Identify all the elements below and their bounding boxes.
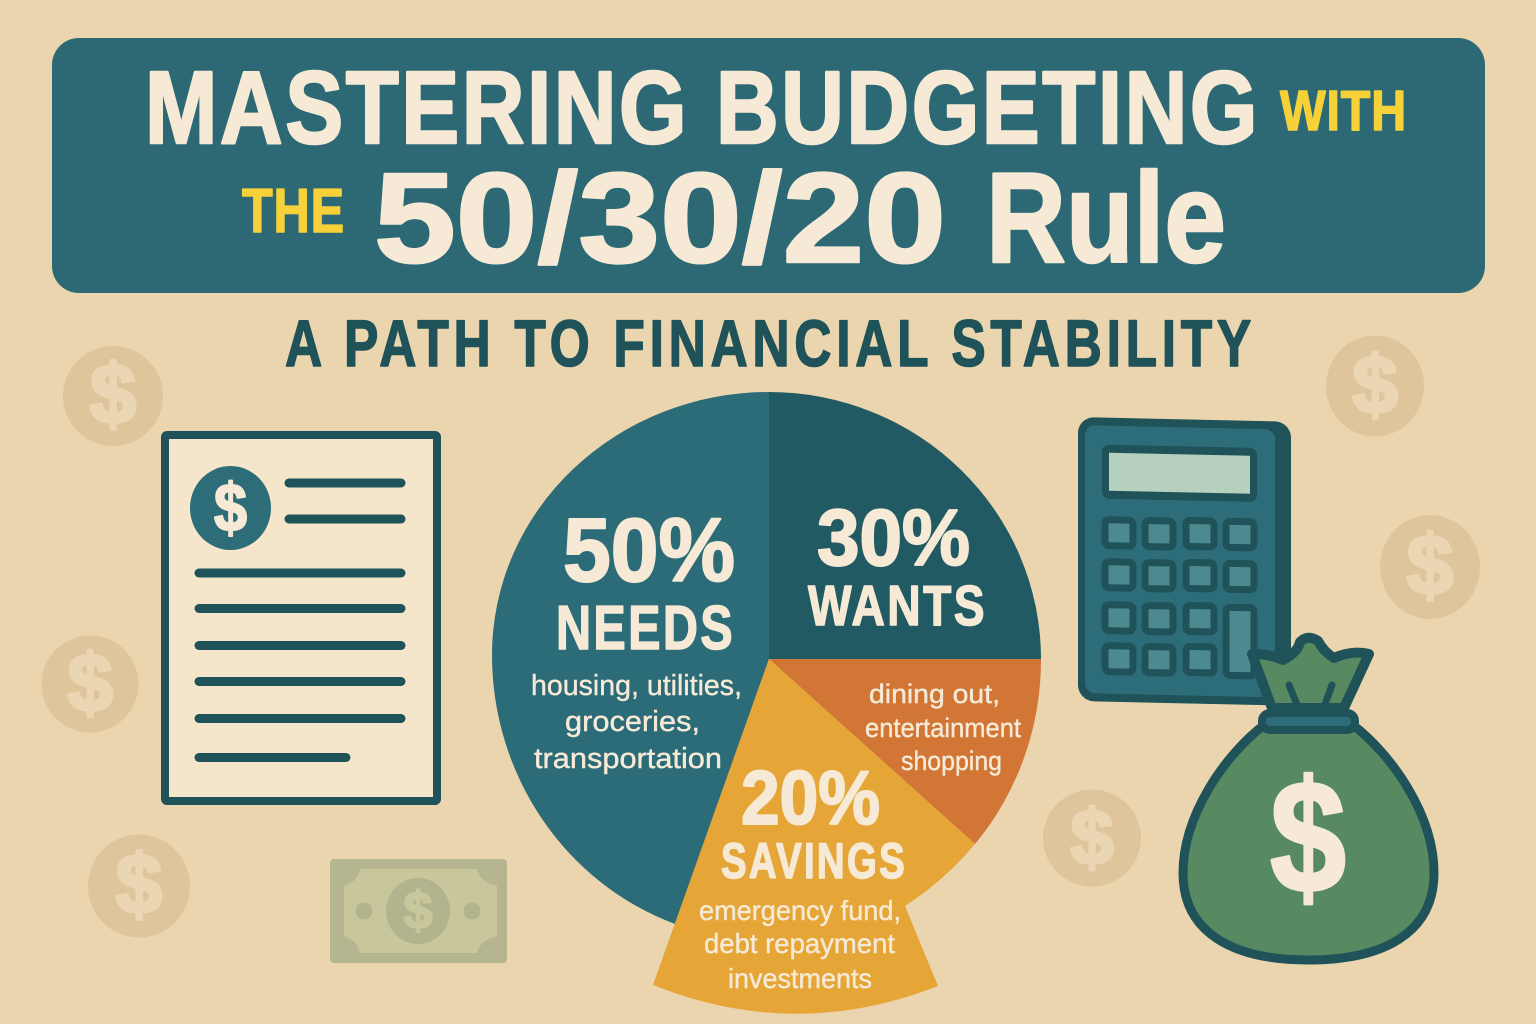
wants detail label: shopping — [901, 746, 1002, 776]
calculator display — [1102, 445, 1257, 502]
coin bottom left — [88, 834, 190, 938]
savings label: 20% — [741, 756, 880, 841]
coin middle left: $ — [67, 638, 113, 729]
calculator icon — [1078, 417, 1291, 706]
savings label: debt repayment — [704, 928, 895, 959]
coin lower right — [1043, 790, 1141, 886]
slice: wants detail — [769, 659, 1041, 844]
calculator keys — [1105, 519, 1254, 676]
background coins — [42, 336, 1480, 938]
document text lines — [199, 483, 401, 758]
subtitle: A PATH TO FINANCIAL STABILITY — [285, 306, 1256, 380]
savings label: emergency fund, — [699, 895, 901, 926]
title word: with: WITH — [1280, 79, 1407, 143]
coin top right — [1326, 336, 1424, 436]
slice: wants — [769, 392, 1041, 659]
savings label: SAVINGS — [721, 833, 907, 889]
needs label: housing, utilities, — [531, 670, 742, 702]
wants detail label — [865, 679, 1021, 776]
title numbers: 50/30/20 — [374, 147, 946, 290]
budget document icon — [165, 435, 437, 801]
bag top ruffle — [1252, 638, 1369, 708]
coin lower right: $ — [1070, 793, 1114, 881]
coin top left — [63, 346, 163, 446]
wants detail label: entertainment — [865, 713, 1021, 743]
title word: rule: Rule — [986, 147, 1226, 290]
bag body — [1183, 725, 1434, 960]
wants label: WANTS — [808, 574, 987, 638]
needs label: groceries, — [565, 706, 700, 738]
title word: the: THE — [242, 177, 345, 246]
dollar bill watermark: $ — [404, 882, 433, 940]
coin middle right: $ — [1407, 518, 1453, 612]
wants detail label: dining out, — [869, 679, 1000, 709]
coin middle right — [1380, 515, 1480, 619]
document dollar badge: $ — [214, 470, 247, 546]
savings label — [699, 756, 907, 994]
money bag icon — [1183, 638, 1434, 960]
dollar bill watermark — [330, 859, 507, 963]
coin top right: $ — [1352, 340, 1398, 431]
slice: savings — [653, 659, 975, 1014]
coin middle left — [42, 636, 138, 732]
wants label — [808, 493, 987, 638]
slice: needs — [492, 392, 769, 924]
needs label: NEEDS — [556, 594, 735, 663]
bag band — [1262, 713, 1355, 730]
coin bottom left: $ — [116, 837, 162, 931]
needs label: transportation — [534, 743, 722, 775]
bag ties — [1289, 685, 1332, 707]
title line one: MASTERING BUDGETING — [145, 50, 1260, 165]
savings label: investments — [728, 963, 872, 994]
pie chart — [492, 392, 1041, 1014]
wants label: 30% — [817, 493, 970, 582]
document dollar badge — [190, 466, 271, 550]
coin top left: $ — [90, 347, 136, 441]
needs label — [531, 501, 742, 775]
needs label: 50% — [563, 501, 735, 601]
bag dollar sign: $ — [1270, 747, 1346, 926]
title banner — [52, 38, 1485, 293]
